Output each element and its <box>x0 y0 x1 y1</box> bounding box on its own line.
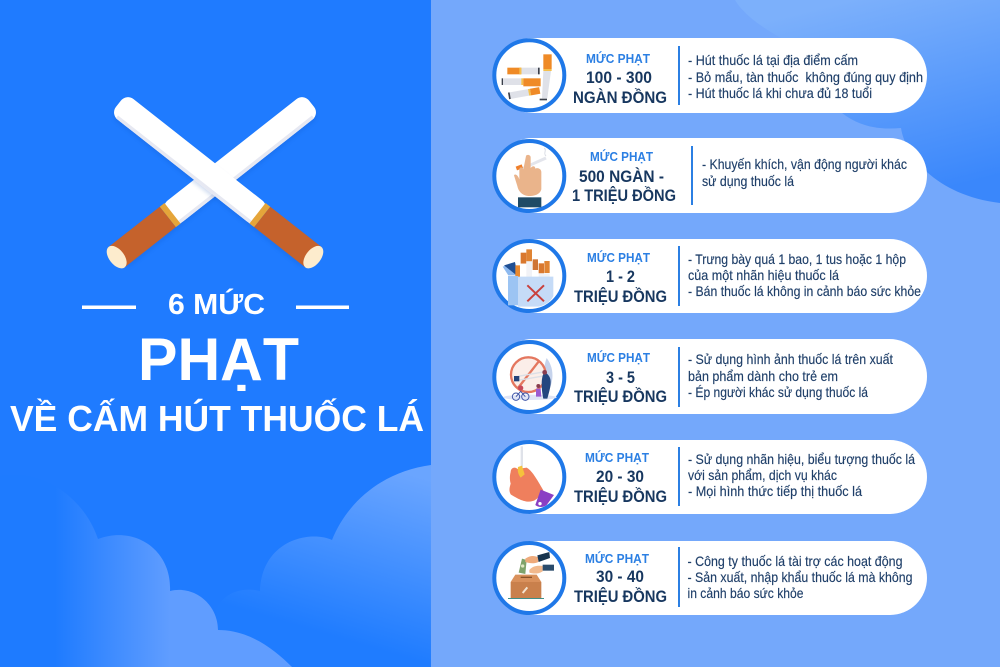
violations: sử dụng thuốc lá <box>702 173 794 189</box>
pill background <box>495 541 927 615</box>
divider <box>678 246 680 306</box>
violations <box>688 451 915 499</box>
cloud: bottom right of panel <box>216 465 431 667</box>
fine unit: NGÀN ĐỒNG <box>573 88 667 107</box>
cigarette shadow on top <box>111 97 320 269</box>
panel: fine 4 <box>494 339 927 414</box>
fine amount: 3 - 5 <box>606 369 635 387</box>
heading line: 6 MỨC: 6 MỨC <box>168 287 265 321</box>
left background <box>0 0 431 667</box>
violations: - Hút thuốc lá tại địa điểm cấm <box>688 52 858 68</box>
cloud: top right <box>735 0 1000 203</box>
violations <box>688 52 923 101</box>
panel: fine 5 <box>494 440 927 514</box>
heading: title <box>10 287 424 439</box>
fine label: MỨC PHẠT <box>587 250 650 265</box>
heading line: PHẠT: PHẠT <box>138 326 299 393</box>
fine label: MỨC PHẠT <box>585 551 649 566</box>
violations: - Bỏ mẩu, tàn thuốc không đúng quy định <box>688 69 923 85</box>
cigarette right to left <box>103 94 320 272</box>
violations: - Hút thuốc lá khi chưa đủ 18 tuổi <box>688 85 872 101</box>
divider <box>678 46 680 105</box>
icon: crossed cigarettes <box>103 94 327 272</box>
fine unit: TRIỆU ĐỒNG <box>574 587 667 606</box>
violations: - Khuyến khích, vận động người khác <box>702 156 907 172</box>
violations: - Sử dụng hình ảnh thuốc lá trên xuất <box>688 351 893 367</box>
panel: fine 3 <box>494 239 927 313</box>
fine amount: 30 - 40 <box>596 568 644 586</box>
panel: fine 1 <box>494 38 927 113</box>
violations: bản phẩm dành cho trẻ em <box>688 368 838 384</box>
pill background <box>495 138 927 213</box>
panel: fine 2 <box>494 138 927 213</box>
violations <box>702 156 907 189</box>
cloud: bottom left of panel <box>0 475 292 667</box>
fine amount: 20 - 30 <box>596 468 644 486</box>
pill background <box>495 239 927 313</box>
divider <box>678 447 680 506</box>
violations: in cảnh báo sức khỏe <box>688 585 804 601</box>
fine amount: 100 - 300 <box>586 69 652 87</box>
heading line: VỀ CẤM HÚT THUỐC LÁ: VỀ CẤM HÚT THUỐC LÁ <box>10 397 424 439</box>
icon: open cigarette pack with cross <box>494 241 564 311</box>
violations <box>688 251 921 299</box>
fine amount: 1 - 2 <box>606 268 635 286</box>
violations: - Bán thuốc lá không in cảnh báo sức khỏe <box>688 283 921 299</box>
panel: right background <box>431 0 1000 667</box>
icon: no smoking sign with family <box>494 342 564 412</box>
violations <box>688 351 893 400</box>
violations: của một nhãn hiệu thuốc lá <box>688 267 839 283</box>
fine unit: TRIỆU ĐỒNG <box>574 387 667 406</box>
icon: money into donation box <box>494 543 564 613</box>
divider <box>678 347 680 407</box>
divider <box>678 547 680 607</box>
violations: - Mọi hình thức tiếp thị thuốc lá <box>688 483 862 499</box>
fine label: MỨC PHẠT <box>587 350 650 365</box>
rule right <box>296 306 349 309</box>
rule left <box>82 306 136 309</box>
pill background <box>495 440 927 514</box>
panel: left title area <box>0 0 431 667</box>
fine amount: 500 NGÀN - <box>579 167 664 186</box>
panel: fine 6 <box>494 541 927 615</box>
fine unit: TRIỆU ĐỒNG <box>574 487 667 506</box>
violations: - Công ty thuốc lá tài trợ các hoạt động <box>688 553 902 569</box>
fine label: MỨC PHẠT <box>590 149 653 164</box>
fine label: MỨC PHẠT <box>585 450 649 465</box>
pill background <box>495 339 927 414</box>
violations <box>688 553 912 601</box>
violations: với sản phẩm, dịch vụ khác <box>688 467 837 483</box>
cigarette left to right <box>110 94 327 272</box>
icon: cigarette butts <box>494 40 564 110</box>
fine unit: 1 TRIỆU ĐỒNG <box>572 186 676 205</box>
violations: - Trưng bày quá 1 bao, 1 tus hoặc 1 hộp <box>688 251 906 267</box>
fine label: MỨC PHẠT <box>586 51 650 66</box>
violations: - Sản xuất, nhập khẩu thuốc lá mà không <box>688 569 912 585</box>
divider <box>691 146 693 205</box>
icon: hand holding cigarette <box>494 141 564 211</box>
icon: fist holding cigarette <box>494 442 564 512</box>
cigarette shadow <box>110 97 319 269</box>
violations: - Ép người khác sử dụng thuốc lá <box>688 384 868 400</box>
fine unit: TRIỆU ĐỒNG <box>574 287 667 306</box>
violations: - Sử dụng nhãn hiệu, biểu tượng thuốc lá <box>688 451 915 467</box>
pill background <box>495 38 927 113</box>
